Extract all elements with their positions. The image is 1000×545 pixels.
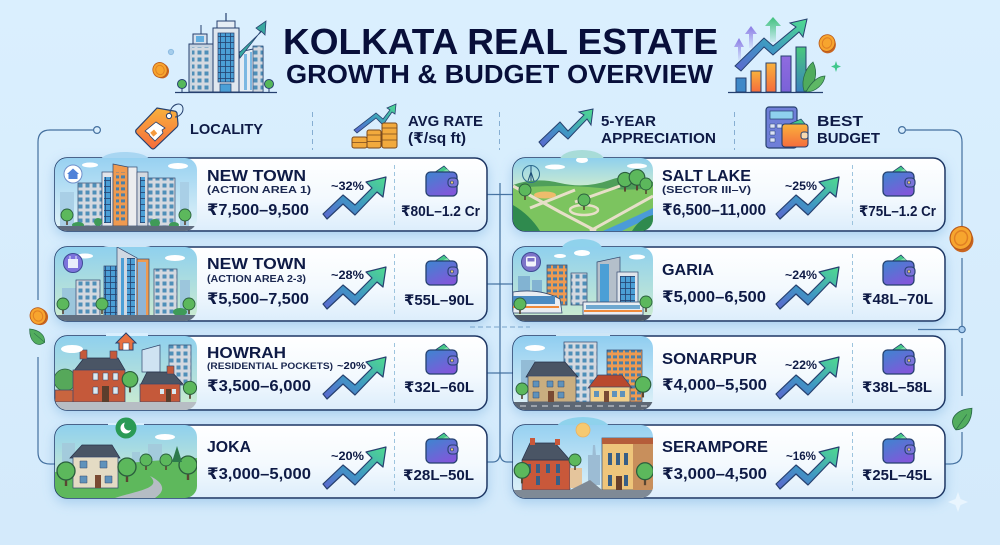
icon: house on card top: [116, 333, 136, 350]
locality name: SALT LAKE: [662, 168, 751, 185]
best budget: ₹55L–90L: [404, 293, 474, 309]
scene: apartment towers: [55, 150, 197, 231]
panel: Joka: [55, 418, 487, 498]
average rate: ₹5,500–7,500: [207, 291, 309, 308]
scene: park and river: [513, 157, 653, 231]
scene: metro and towers: [513, 247, 653, 321]
icon: wallet: [883, 166, 915, 196]
scene: houses and apartment blocks: [513, 336, 653, 410]
column header: best budget: BEST: [817, 113, 863, 130]
icon: green sparkle: [831, 61, 841, 72]
column header: best budget: BUDGET: [817, 130, 880, 147]
scene: heritage street: [513, 418, 653, 498]
scene: suburban house and park: [55, 425, 197, 498]
average rate: ₹3,500–6,000: [207, 378, 311, 395]
average rate: ₹3,000–4,500: [662, 466, 767, 483]
average rate: ₹6,500–11,000: [662, 202, 766, 219]
column header: best budget: [766, 107, 880, 148]
appreciation arrow: [323, 267, 386, 309]
best budget: ₹32L–60L: [404, 380, 474, 396]
column header: average rate: [352, 104, 483, 148]
panel: Howrah: [54, 333, 487, 410]
panel: Serampore: [513, 417, 945, 498]
title: KOLKATA REAL ESTATE: [283, 21, 718, 62]
average rate: ₹3,000–5,000: [207, 466, 311, 483]
icon: crescent badge: [116, 418, 136, 438]
column header: average rate: AVG RATE: [408, 113, 483, 130]
scene: high rise towers: [55, 247, 197, 321]
locality name: (ACTION AREA 2-3): [207, 273, 306, 285]
locality name: (ACTION AREA 1): [207, 184, 311, 196]
appreciation value: ~20%: [331, 449, 364, 463]
header dividers: [312, 112, 734, 150]
locality name: NEW TOWN: [207, 168, 306, 185]
locality name: NEW TOWN: [207, 256, 306, 273]
icon: landmark badge: [522, 166, 540, 182]
average rate: ₹5,000–6,500: [662, 289, 766, 306]
locality name: [207, 256, 306, 285]
icon: city skyline with growth arrow: [175, 13, 277, 92]
column header: appreciation: APPRECIATION: [601, 130, 716, 147]
appreciation arrow: [776, 357, 839, 399]
panel: Sonarpur: [513, 333, 945, 410]
title: [283, 21, 718, 89]
best budget: ₹75L–1.2 Cr: [859, 204, 936, 220]
appreciation arrow: [776, 447, 839, 489]
locality name: SONARPUR: [662, 351, 757, 368]
appreciation value: ~22%: [785, 358, 817, 372]
icon: coin top right: [816, 32, 839, 56]
icon: coin left margin: [27, 304, 51, 328]
connector lines: [38, 127, 965, 464]
locality name: [207, 168, 311, 196]
column header: appreciation: 5-YEAR: [601, 113, 656, 130]
decorative dot: [168, 49, 174, 55]
icon: sun: [576, 423, 590, 437]
appreciation arrow: [776, 177, 839, 219]
best budget: ₹28L–50L: [403, 468, 474, 484]
appreciation value: ~16%: [786, 449, 816, 463]
best budget: ₹25L–45L: [862, 468, 932, 484]
icon: coin right margin: [947, 224, 977, 255]
icon: wallet: [426, 433, 458, 463]
icon: building badge: [64, 254, 82, 272]
panel: New Town Action Area 2-3: [55, 245, 487, 321]
average rate: ₹4,000–5,500: [662, 377, 767, 394]
locality name: SERAMPORE: [662, 439, 768, 456]
icon: wallet: [426, 344, 458, 374]
locality name: (SECTOR III–V): [662, 184, 751, 196]
locality name: JOKA: [207, 439, 251, 456]
appreciation arrow: [323, 177, 386, 219]
icon: faint sparkle: [948, 492, 968, 512]
icon: wallet: [883, 255, 915, 285]
icon: wallet: [883, 433, 915, 463]
best budget: ₹38L–58L: [862, 380, 932, 396]
icon: floating coin top left: [151, 60, 171, 81]
appreciation arrow: [323, 357, 386, 399]
column header: locality: LOCALITY: [190, 121, 263, 138]
icon: wallet: [426, 166, 458, 196]
appreciation value: ~24%: [785, 268, 817, 282]
locality name: (RESIDENTIAL POCKETS): [207, 361, 333, 372]
scene: brick houses: [54, 336, 197, 410]
best budget: ₹48L–70L: [862, 292, 933, 308]
locality name: HOWRAH: [207, 345, 286, 362]
panel: New Town Action Area 1: [55, 150, 487, 231]
icon: house badge: [64, 165, 82, 183]
icon: metro badge: [522, 252, 540, 272]
appreciation value: ~25%: [785, 179, 817, 193]
column header: average rate: (₹/sq ft): [408, 130, 466, 147]
locality name: [207, 345, 333, 372]
icon: bar chart with growth arrows: [728, 17, 825, 92]
title: GROWTH & BUDGET OVERVIEW: [286, 59, 713, 89]
locality name: GARIA: [662, 262, 714, 279]
icon: wallet: [426, 255, 458, 285]
panel: Salt Lake: [513, 150, 945, 231]
appreciation value: ~28%: [331, 268, 364, 282]
appreciation arrow: [323, 447, 386, 489]
locality name: [662, 168, 751, 196]
column header: appreciation: [539, 109, 716, 147]
icon: leaf right margin: [951, 405, 972, 432]
best budget: ₹80L–1.2 Cr: [401, 204, 480, 220]
icon: leaf left margin: [26, 329, 47, 346]
column header: locality: [136, 104, 263, 149]
appreciation value: ~32%: [331, 179, 364, 193]
appreciation arrow: [776, 267, 839, 309]
panel: Garia: [513, 239, 945, 321]
average rate: ₹7,500–9,500: [207, 202, 309, 219]
icon: wallet: [883, 344, 915, 374]
appreciation value: ~20%: [337, 360, 367, 372]
